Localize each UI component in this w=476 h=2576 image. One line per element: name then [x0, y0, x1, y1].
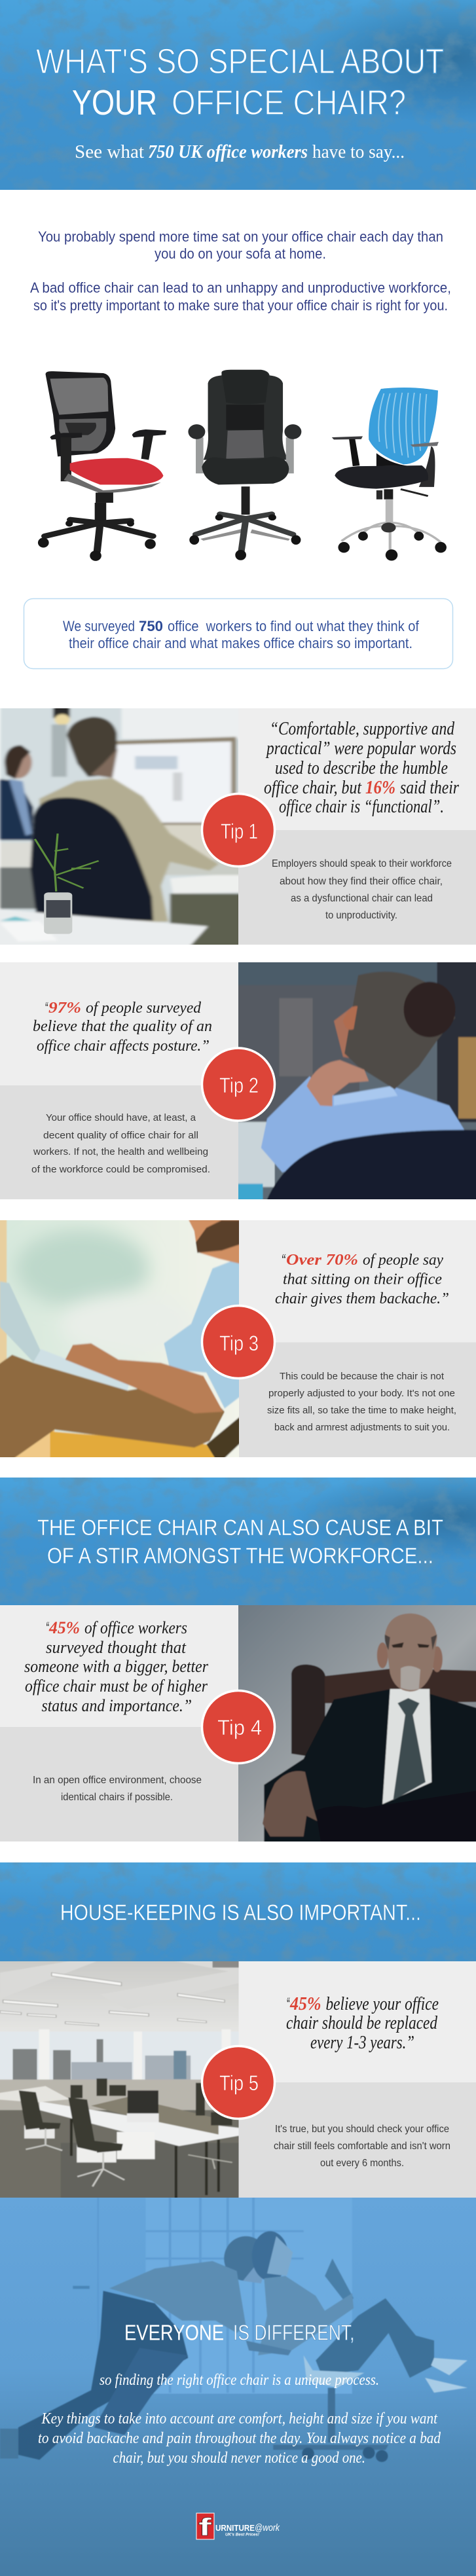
title: OFFICE CHAIR? — [172, 83, 406, 122]
callout: survey box: their office chair and what makes office chairs so important. — [69, 635, 412, 651]
heading — [37, 1515, 443, 1569]
advice panel: chair still feels comfortable and isn't worn — [274, 2141, 450, 2152]
quote panel: 45% — [48, 1618, 80, 1637]
quote panel: “ — [281, 1252, 286, 1269]
intro text: A bad office chair can lead to an unhappy and unproductive workforce, — [30, 280, 451, 296]
photo: senior man in armchair — [234, 1599, 476, 1847]
quote panel: believe that the quality of an — [33, 1018, 212, 1035]
quote panel: said their — [400, 778, 459, 798]
advice panel: identical chairs if possible. — [61, 1792, 173, 1803]
quote panel: 45% — [289, 1994, 321, 2014]
quote panel: someone with a bigger, better — [24, 1657, 209, 1676]
quote panel: office chair, but — [264, 778, 362, 798]
advice panel: workers. If not, the health and wellbeing — [33, 1146, 208, 1157]
logo: furniture at work: f — [198, 2514, 212, 2541]
heading: IS DIFFERENT, — [233, 2320, 355, 2345]
badge: tip 2: Tip 2 — [219, 1074, 259, 1097]
quote panel — [238, 708, 476, 830]
banner: workforce heading — [0, 1478, 476, 1605]
callout: survey box: office workers to find out what they think of — [168, 618, 420, 634]
quote panel — [0, 1605, 238, 1727]
badge: tip 3 — [202, 1305, 275, 1379]
advice panel: out every 6 months. — [320, 2158, 404, 2169]
panel: tip 2 — [0, 956, 476, 1206]
photo: man typing on laptop — [0, 1213, 246, 1464]
banner: housekeeping heading — [0, 1862, 476, 1961]
panel: tip 1 — [0, 702, 476, 951]
advice panel: Employers should speak to their workforce — [272, 858, 452, 869]
quote panel: believe your office — [326, 1994, 439, 2014]
advice panel — [0, 1085, 238, 1199]
callout: survey box: We surveyed — [63, 618, 135, 634]
title: YOUR — [72, 83, 157, 122]
quote panel — [0, 962, 238, 1085]
panel: tip 3 — [0, 1213, 476, 1464]
quote panel: chair should be replaced — [286, 2013, 438, 2033]
quote panel: office chair must be of higher — [25, 1677, 208, 1696]
advice panel: to unproductivity. — [325, 910, 397, 921]
closing text — [38, 2372, 441, 2467]
panel: tip 4 — [0, 1599, 476, 1847]
badge: tip 4 — [202, 1690, 275, 1764]
badge: tip 3: Tip 3 — [219, 1332, 259, 1355]
photo: two women racing on office chair, blue tint — [0, 2198, 467, 2462]
intro text: you do on your sofa at home. — [155, 245, 326, 262]
closing text: so finding the right office chair is a unique process. — [100, 2372, 379, 2389]
quote panel: of people say — [363, 1252, 443, 1269]
quote panel: “ — [45, 1000, 48, 1017]
icon: black leather executive chair — [188, 370, 301, 560]
advice panel: In an open office environment, choose — [33, 1775, 202, 1786]
quote panel: status and importance.” — [42, 1696, 192, 1715]
advice panel: as a dysfunctional chair can lead — [291, 893, 433, 904]
quote panel: every 1-3 years.” — [310, 2033, 414, 2053]
advice panel — [0, 1727, 238, 1841]
advice panel — [238, 2082, 476, 2198]
advice panel: size fits all, so take the time to make height, — [267, 1405, 456, 1416]
badge: tip 4: Tip 4 — [217, 1716, 262, 1739]
quote panel: 16% — [365, 778, 395, 798]
advice panel: of the workforce could be compromised. — [31, 1164, 210, 1175]
badge: tip 1: Tip 1 — [221, 820, 258, 843]
heading: EVERYONE — [124, 2320, 224, 2345]
subtitle: See what — [75, 141, 144, 162]
quote panel: “ — [46, 1618, 50, 1637]
logo: furniture at work: UK's Best Prices! — [225, 2532, 260, 2537]
photo: woman holding her neck — [234, 956, 476, 1206]
logo: furniture at work: @work — [255, 2522, 280, 2533]
quote panel: that sitting on their office — [283, 1271, 442, 1288]
logo: furniture at work — [196, 2513, 280, 2541]
advice panel — [239, 1342, 476, 1457]
badge: tip 5 — [202, 2046, 275, 2118]
photo: open plan office — [0, 1955, 246, 2204]
intro text: You probably spend more time sat on your office chair each day than — [38, 228, 443, 245]
panel: tip 5 — [0, 1955, 476, 2204]
chairs row — [38, 370, 447, 561]
badge: tip 5: Tip 5 — [219, 2071, 259, 2095]
advice panel: This could be because the chair is not — [280, 1371, 445, 1382]
subtitle: 750 UK office workers — [148, 141, 308, 162]
intro text — [30, 228, 451, 314]
logo: furniture at work: URNITURE — [215, 2523, 255, 2533]
icon: mesh chair with red seat — [38, 371, 166, 561]
quote panel: used to describe the humble — [275, 758, 448, 778]
quote panel: 97% — [48, 1000, 81, 1017]
quote panel: “ — [286, 1994, 290, 2014]
advice panel: decent quality of office chair for all — [43, 1130, 198, 1141]
icon: plant in jar — [35, 833, 99, 934]
header banner — [0, 0, 476, 190]
quote panel: office chair affects posture.” — [37, 1038, 210, 1055]
heading: HOUSE-KEEPING IS ALSO IMPORTANT... — [60, 1900, 421, 1925]
quote panel — [238, 1961, 476, 2082]
advice panel: back and armrest adjustments to suit you. — [274, 1422, 450, 1433]
heading — [124, 2320, 355, 2345]
title — [36, 42, 444, 122]
closing text: chair, but you should never notice a good one. — [113, 2450, 365, 2467]
badge: tip 1 — [202, 793, 275, 867]
advice panel: about how they find their office chair, — [280, 876, 443, 887]
advice panel: It's true, but you should check your office — [275, 2124, 449, 2135]
quote panel: of office workers — [84, 1618, 187, 1637]
advice panel: properly adjusted to your body. It's not one — [268, 1388, 455, 1399]
quote panel: surveyed thought that — [46, 1638, 187, 1657]
photo: woman at desk from behind — [0, 702, 246, 951]
callout: survey box — [24, 598, 453, 669]
advice panel — [238, 830, 476, 945]
panel: closing message — [0, 2198, 476, 2576]
icon: blue plastic back chair — [332, 388, 447, 560]
subtitle: have to say... — [312, 141, 405, 162]
quote panel — [239, 1220, 476, 1342]
badge: tip 2 — [202, 1048, 275, 1121]
advice panel: Your office should have, at least, a — [46, 1112, 196, 1123]
quote panel: chair gives them backache.” — [275, 1290, 449, 1307]
callout: survey box: 750 — [139, 618, 163, 634]
subtitle — [75, 141, 405, 162]
quote panel: Over 70% — [286, 1252, 358, 1269]
quote panel: of people surveyed — [86, 1000, 202, 1017]
